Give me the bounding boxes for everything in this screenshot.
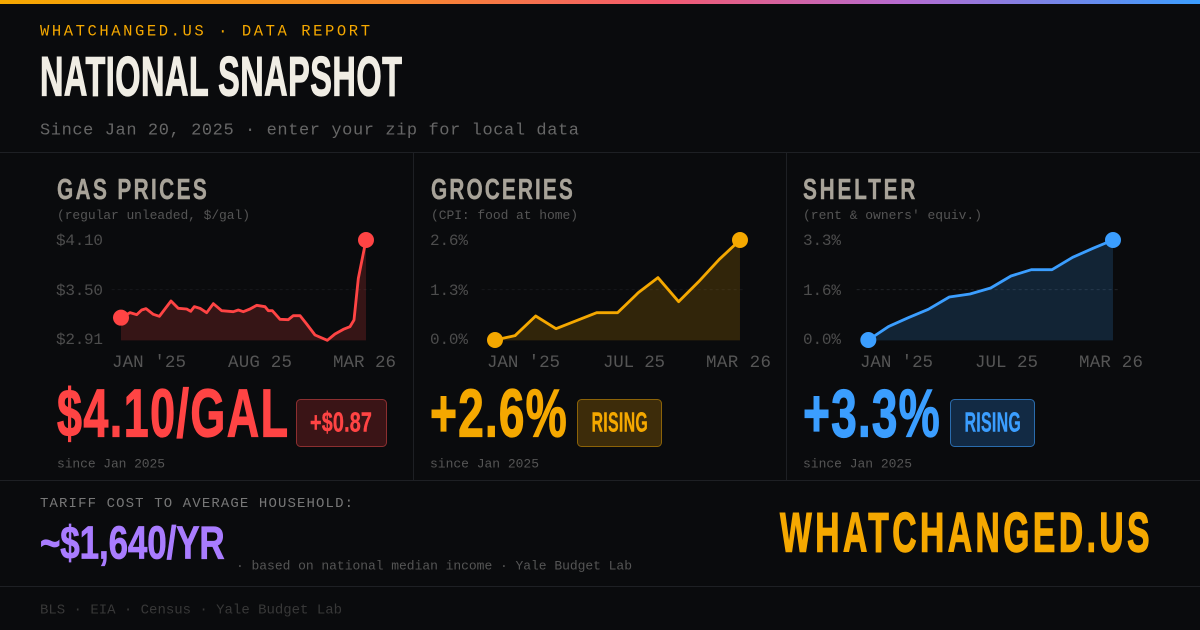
panel: groceries: [430, 174, 771, 472]
panel: gas prices: [56, 174, 396, 472]
big value: groceries: +2.6%: [430, 376, 567, 452]
y axis labels: groceries: 0.0%: [430, 331, 468, 349]
eyebrow: WHATCHANGED.US · DATA REPORT: [40, 22, 370, 40]
tariff callout: [40, 496, 632, 574]
x axis labels: gas: AUG 25: [228, 353, 292, 373]
subheading: groceries: (CPI: food at home): [431, 208, 578, 223]
x axis labels: gas: [112, 353, 396, 373]
top gradient bar: [0, 0, 1200, 4]
heading: gas prices: GAS PRICES: [57, 174, 207, 206]
x axis labels: groceries: JAN '25: [487, 353, 560, 373]
note: gas: since Jan 2025: [57, 456, 165, 472]
line chart: groceries: [482, 232, 748, 348]
subheading: shelter: (rent & owners' equiv.): [803, 208, 982, 223]
y axis labels: gas: [56, 232, 103, 349]
x axis labels: shelter: [860, 353, 1143, 373]
x axis labels: shelter: MAR 26: [1079, 353, 1143, 373]
brand wordmark: WHATCHANGED.US: [780, 501, 1150, 564]
y axis labels: shelter: 3.3%: [803, 232, 841, 250]
y axis labels: shelter: 1.6%: [803, 282, 841, 300]
tariff label: TARIFF COST TO AVERAGE HOUSEHOLD:: [40, 496, 353, 512]
x axis labels: groceries: [487, 353, 771, 373]
big value: gas: $4.10/GAL: [57, 376, 288, 452]
badge: rising (groceries): [578, 400, 662, 446]
badge: +$0.87: +$0.87: [310, 407, 372, 438]
x axis labels: shelter: JAN '25: [860, 353, 933, 373]
title: NATIONAL SNAPSHOT: [40, 45, 402, 108]
x axis labels: gas: MAR 26: [333, 353, 396, 373]
note: shelter: since Jan 2025: [803, 456, 912, 472]
note: groceries: since Jan 2025: [430, 456, 539, 472]
badge: rising (shelter): RISING: [964, 407, 1021, 438]
y axis labels: gas: $3.50: [56, 282, 103, 300]
y axis labels: groceries: [430, 232, 468, 349]
x axis labels: groceries: MAR 26: [706, 353, 771, 373]
line chart: gas: [112, 232, 374, 340]
heading: shelter: SHELTER: [803, 174, 915, 206]
tariff note: · based on national median income · Yale Budget Lab: [236, 558, 632, 574]
y axis labels: gas: $2.91: [56, 331, 103, 349]
panel: shelter: [803, 174, 1143, 472]
tariff value: ~$1,640/YR: [40, 517, 225, 569]
x axis labels: gas: JAN '25: [112, 353, 186, 373]
badge: rising (groceries): RISING: [592, 407, 648, 438]
badge: +$0.87: [296, 400, 386, 446]
big value: shelter: +3.3%: [803, 376, 940, 452]
subtitle: Since Jan 20, 2025 · enter your zip for local data: [40, 122, 579, 140]
x axis labels: shelter: JUL 25: [975, 353, 1038, 373]
x axis labels: groceries: JUL 25: [603, 353, 665, 373]
heading: groceries: GROCERIES: [431, 174, 573, 206]
y axis labels: groceries: 1.3%: [430, 282, 468, 300]
y axis labels: shelter: [803, 232, 841, 349]
y axis labels: shelter: 0.0%: [803, 331, 841, 349]
footer sources: BLS · EIA · Census · Yale Budget Lab: [40, 602, 342, 618]
y axis labels: groceries: 2.6%: [430, 232, 468, 250]
header: [40, 22, 579, 140]
subheading: gas: (regular unleaded, $/gal): [57, 208, 250, 223]
line chart: shelter: [857, 232, 1121, 348]
badge: rising (shelter): [950, 400, 1034, 446]
y axis labels: gas: $4.10: [56, 232, 103, 250]
